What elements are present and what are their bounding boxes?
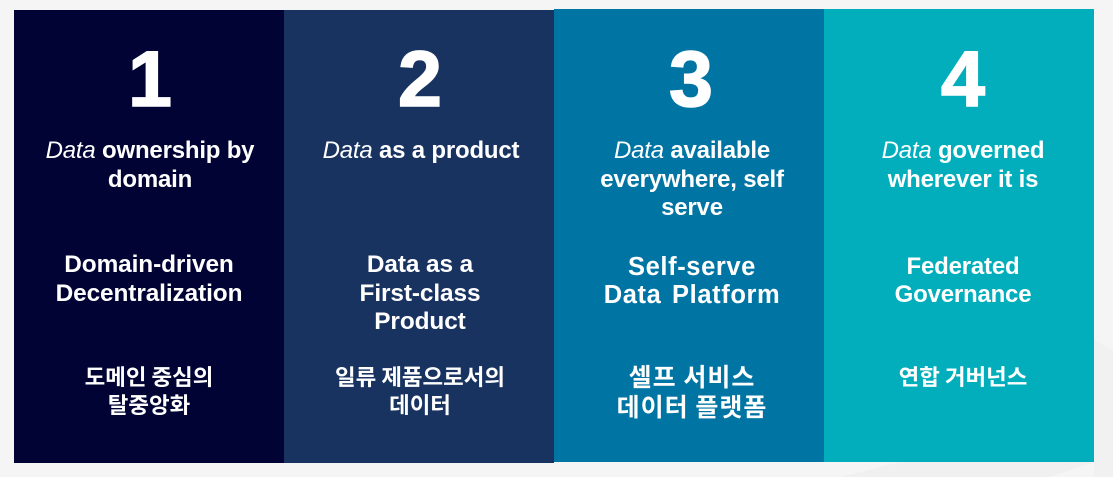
- heading: data available everywhere: [600, 137, 784, 221]
- principle: federated governance: Federated: [907, 253, 1019, 280]
- principle: federated governance: Governance: [895, 281, 1031, 308]
- korean label: 데이터: [389, 388, 451, 420]
- korean label: 데이터 플랫폼: [617, 388, 767, 424]
- principle: federated governance: [895, 253, 1031, 308]
- korean label: 일류 제품으로서의: [335, 360, 505, 392]
- panel 4: federated governance: [824, 9, 1094, 462]
- heading: data as a product: Data as a product: [323, 137, 519, 164]
- korean label: 도메인 중심의: [85, 360, 213, 392]
- principle: domain-driven decentralization: Domain-driven: [64, 251, 234, 278]
- heading: data governed wherever it is: wherever it is: [888, 166, 1038, 193]
- heading: data available everywhere: Data available: [614, 137, 770, 164]
- principle: first-class product: First-class: [360, 280, 480, 306]
- number 1: 1: [128, 34, 172, 123]
- korean label: [335, 360, 505, 420]
- korean label: 셀프 서비스: [629, 358, 755, 394]
- panel 2: data as a product: [284, 10, 554, 463]
- heading: data available everywhere: everywhere, self: [600, 166, 784, 192]
- principle: first-class product: [360, 251, 480, 335]
- heading: data ownership by domain: domain: [108, 166, 192, 193]
- principle: domain-driven decentralization: Decentralization: [56, 280, 242, 306]
- korean label: 탈중앙화: [108, 388, 190, 420]
- principle: self-serve data platform: Data Platform: [604, 281, 780, 309]
- number 4: 4: [941, 34, 985, 123]
- heading: data available everywhere: serve: [661, 194, 723, 221]
- principle: self-serve data platform: [604, 253, 780, 309]
- heading: data governed wherever it is: [882, 137, 1044, 193]
- panel 1: domain ownership: [14, 10, 284, 463]
- principle: self-serve data platform: Self-serve: [628, 253, 756, 281]
- heading: data ownership by domain: [46, 137, 254, 193]
- number 2: 2: [398, 34, 442, 123]
- korean label: [85, 360, 213, 420]
- heading: data ownership by domain: Data ownership by: [46, 137, 254, 164]
- principle: domain-driven decentralization: [56, 251, 242, 306]
- principle: first-class product: Data as a: [367, 251, 473, 278]
- korean label: [617, 358, 767, 424]
- number 3: 3: [669, 34, 713, 123]
- heading: data governed wherever it is: Data governed: [882, 137, 1044, 164]
- principle: first-class product: Product: [374, 308, 466, 335]
- panel 3: self serve: [554, 9, 824, 462]
- korean label: 연합 거버넌스: [899, 360, 1027, 392]
